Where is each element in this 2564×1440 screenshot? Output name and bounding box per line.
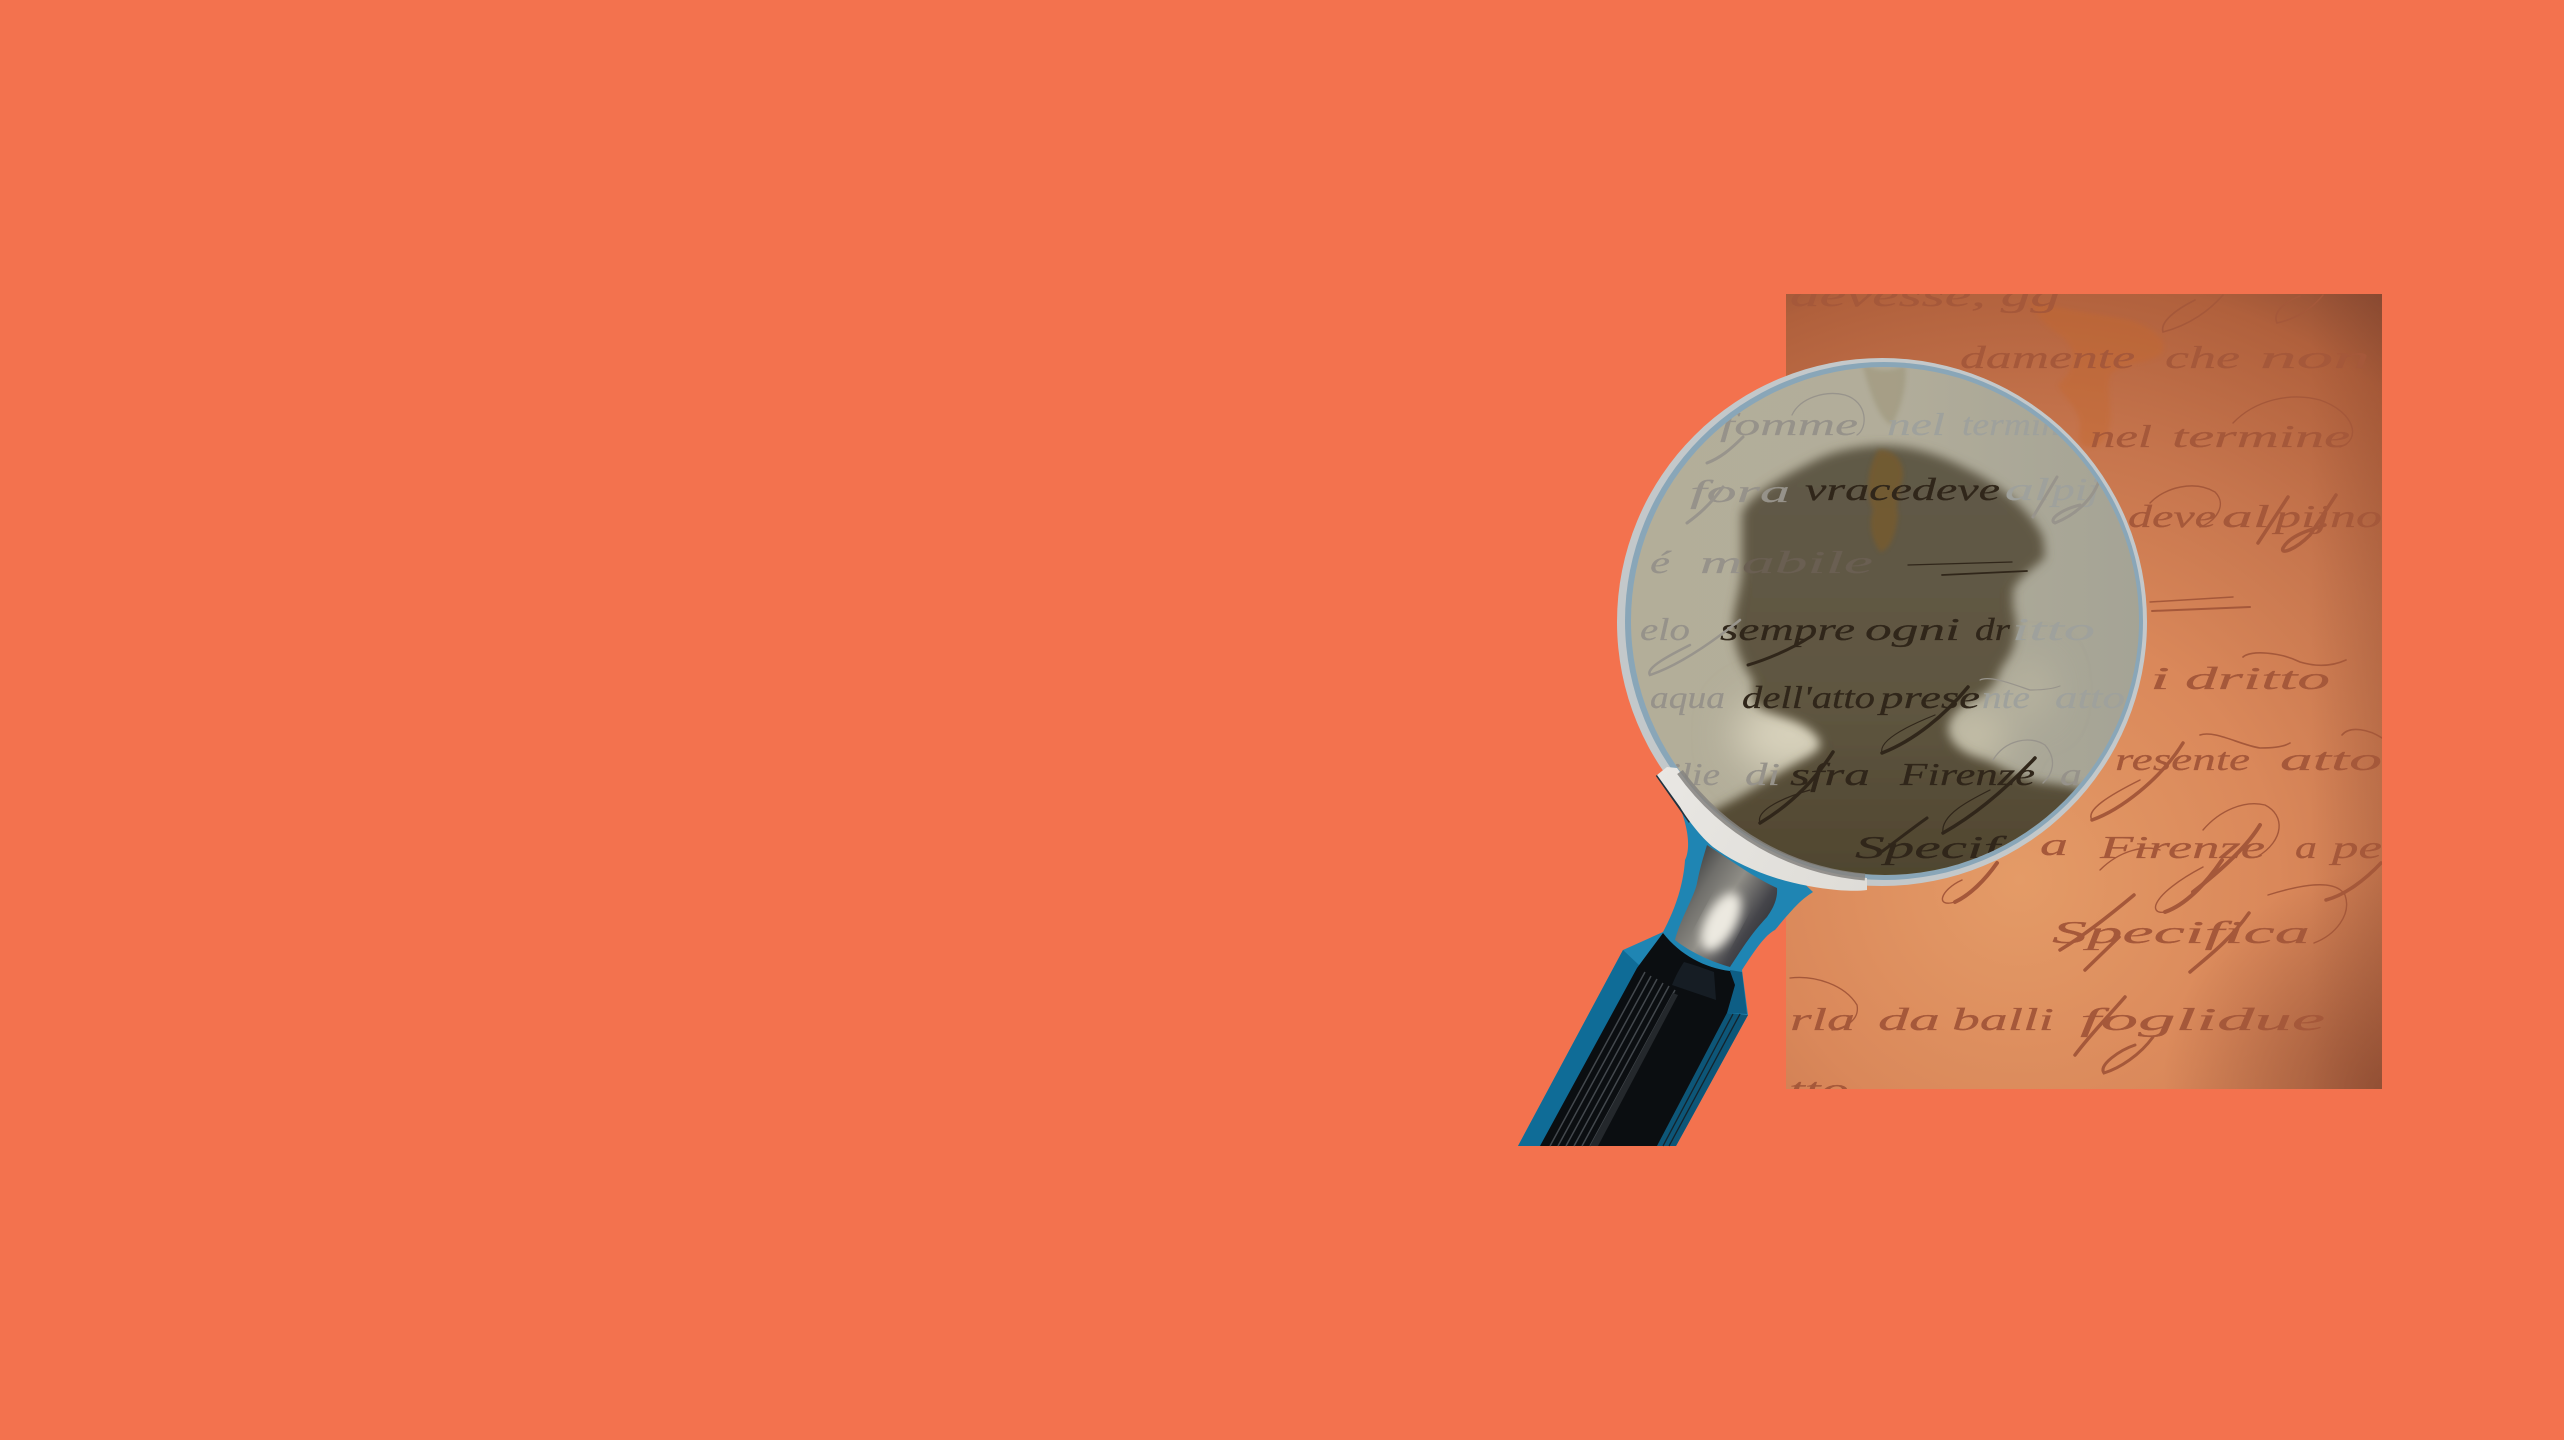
handwriting in lens: fomme bbox=[1720, 406, 1858, 442]
handwriting on paper: che bbox=[2165, 339, 2240, 375]
handwriting on paper: resente bbox=[2115, 741, 2250, 777]
lens light areas bbox=[1726, 682, 2040, 778]
handwriting on paper: Specifica bbox=[2052, 914, 2310, 950]
water stain bbox=[2056, 324, 2158, 446]
handwriting in lens: di bbox=[1745, 756, 1780, 792]
right edge lines bbox=[1663, 1014, 1740, 1146]
handwriting in lens: m bbox=[1700, 544, 1742, 580]
lens flourishes bbox=[1649, 394, 2100, 853]
handle black body bbox=[1540, 933, 1735, 1146]
handwriting on paper: damente bbox=[1960, 339, 2135, 375]
handwriting in lens: prese bbox=[1877, 679, 1980, 715]
handle left dark blue edge bbox=[1518, 950, 1640, 1146]
handwriting on paper: pe bbox=[2329, 829, 2382, 865]
handwriting flourishes on paper bbox=[1790, 295, 2382, 1073]
handwriting in lens: al bbox=[2005, 471, 2050, 507]
handwriting in lens: a bbox=[2060, 756, 2082, 792]
handwriting on paper: dritto bbox=[2185, 660, 2330, 696]
handwriting in lens: abile bbox=[1742, 544, 1873, 580]
bezel dark edge bbox=[1657, 775, 1690, 822]
handwriting on paper: atto bbox=[2280, 741, 2382, 777]
bezel ring blue inner bbox=[1625, 362, 2143, 880]
handwriting in lens: aqua bbox=[1650, 679, 1725, 715]
handle collar highlight bbox=[1672, 962, 1716, 1000]
handwriting in lens: pij bbox=[2049, 471, 2100, 507]
handwriting on paper: pijno bbox=[2272, 498, 2382, 534]
collar blue wedge bbox=[1727, 970, 1747, 1014]
bezel silver guard bbox=[1657, 767, 1867, 891]
handwriting on paper: Firenze bbox=[2098, 829, 2265, 865]
handwriting on paper: tto bbox=[1789, 1071, 1849, 1107]
paper sheet bbox=[1786, 294, 2382, 1089]
panel: manuscript paper bbox=[1786, 277, 2382, 1107]
handwriting in lens: Specif bbox=[1855, 829, 2008, 865]
panel: lens bbox=[1620, 360, 2150, 900]
magnifying glass bbox=[1518, 358, 2150, 1146]
handle neck: blue reflection bbox=[1518, 800, 1813, 1146]
handwriting in lens: Firenze bbox=[1899, 756, 2035, 792]
handwriting on paper: non bbox=[2260, 339, 2370, 375]
ferrule highlight bbox=[1693, 887, 1749, 957]
bezel ring outer bbox=[1617, 358, 2147, 886]
handwriting on paper: nel bbox=[2090, 418, 2152, 454]
handwriting in lens: termin bbox=[1962, 406, 2060, 442]
handwriting on paper: i bbox=[2150, 660, 2170, 696]
handwriting on paper: balli bbox=[1952, 1001, 2054, 1037]
handwriting on paper: al bbox=[2222, 498, 2270, 534]
handwriting in lens: dr bbox=[1975, 611, 2011, 647]
handwriting in lens: nte bbox=[1982, 679, 2030, 715]
handwriting on paper: a bbox=[2295, 829, 2317, 865]
handwriting on paper: devesse, gg bbox=[1790, 277, 2060, 313]
handle facet highlight bbox=[1590, 993, 1678, 1146]
lens stain top bbox=[1864, 368, 1906, 424]
silhouette shadow bbox=[1712, 439, 2080, 875]
handwriting in lens bbox=[1640, 406, 2125, 865]
handwriting in lens: ilie bbox=[1670, 756, 1720, 792]
silhouette stain bbox=[1868, 450, 1903, 552]
handwriting on paper: a bbox=[2040, 826, 2068, 862]
handwriting on paper bbox=[1789, 277, 2382, 1107]
handwriting in lens: itto bbox=[2012, 611, 2095, 647]
lens glass bbox=[1620, 360, 2150, 890]
handwriting in lens: ogni bbox=[1865, 611, 1960, 647]
handwriting on paper: rla bbox=[1790, 1001, 1855, 1037]
bezel inner shade bbox=[1680, 772, 1865, 877]
handwriting on paper: da bbox=[1878, 1001, 1940, 1037]
handwriting in lens: dell'atto bbox=[1742, 679, 1875, 715]
handwriting in lens: vracedeve bbox=[1805, 471, 2000, 507]
handwriting in lens: elo bbox=[1640, 611, 1690, 647]
handwriting on paper: termine bbox=[2172, 418, 2350, 454]
handwriting in lens: fora bbox=[1690, 473, 1790, 509]
handwriting in lens: atto bbox=[2055, 679, 2125, 715]
handwriting in lens: é bbox=[1650, 544, 1673, 580]
metal ferrule bbox=[1675, 845, 1777, 967]
handle right blue edge bbox=[1657, 1013, 1748, 1146]
handwriting in lens: sempre bbox=[1720, 611, 1855, 647]
handwriting on paper: deve bbox=[2128, 498, 2216, 534]
handwriting in lens: sfra bbox=[1790, 756, 1870, 792]
handwriting in lens: nel bbox=[1887, 406, 1945, 442]
handwriting on paper: foglidue bbox=[2080, 1001, 2325, 1037]
handle ribs bbox=[1550, 972, 1675, 1146]
